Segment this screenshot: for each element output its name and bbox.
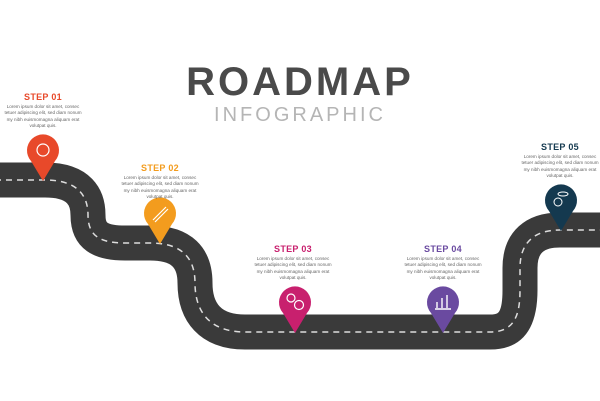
pin 1 <box>27 134 59 181</box>
step 1 text <box>4 92 82 128</box>
step 4 text: STEP 04 <box>424 244 462 254</box>
step 2 text: tetuer adipiscing elit, sed diam nonum <box>121 181 199 186</box>
step 1 text: Lorem ipsum dolor sit amet, consec <box>7 104 79 109</box>
step 5 text: volutpat quis. <box>546 173 574 178</box>
step 2 text: volutpat quis. <box>146 194 174 199</box>
step 5 text: tetuer adipiscing elit, sed diam nonum <box>521 160 599 165</box>
step 2 text <box>121 163 199 199</box>
subtitle: INFOGRAPHIC <box>214 104 386 126</box>
step 2 text: STEP 02 <box>141 163 179 173</box>
step 4 text <box>404 244 482 280</box>
step 5 text: STEP 05 <box>541 142 579 152</box>
step 1 text: tetuer adipiscing elit, sed diam nonum <box>4 110 82 115</box>
step 1 text: volutpat quis. <box>29 123 57 128</box>
step 3 text: tetuer adipiscing elit, sed diam nonum <box>254 262 332 267</box>
step 5 text <box>521 142 599 178</box>
step 4 text: tetuer adipiscing elit, sed diam nonum <box>404 262 482 267</box>
title: ROADMAP <box>186 60 414 104</box>
step 2 text: Lorem ipsum dolor sit amet, consec <box>124 175 196 180</box>
step 1 text: my nibh euismomagna aliquam erat <box>7 117 79 122</box>
step 2 text: my nibh euismomagna aliquam erat <box>124 188 196 193</box>
step 3 text: my nibh euismomagna aliquam erat <box>257 269 329 274</box>
step 3 text: STEP 03 <box>274 244 312 254</box>
pin 5 <box>545 184 577 231</box>
step 5 text: Lorem ipsum dolor sit amet, consec <box>524 154 596 159</box>
step 3 text <box>254 244 332 280</box>
step 4 text: volutpat quis. <box>429 275 457 280</box>
pin 2 <box>144 197 176 244</box>
step 4 text: Lorem ipsum dolor sit amet, consec <box>407 256 479 261</box>
step 1 text: STEP 01 <box>24 92 62 102</box>
pin 3 <box>279 286 311 333</box>
pin 4 <box>427 286 459 333</box>
step 4 text: my nibh euismomagna aliquam erat <box>407 269 479 274</box>
step 5 text: my nibh euismomagna aliquam erat <box>524 167 596 172</box>
step 3 text: Lorem ipsum dolor sit amet, consec <box>257 256 329 261</box>
step 3 text: volutpat quis. <box>279 275 307 280</box>
